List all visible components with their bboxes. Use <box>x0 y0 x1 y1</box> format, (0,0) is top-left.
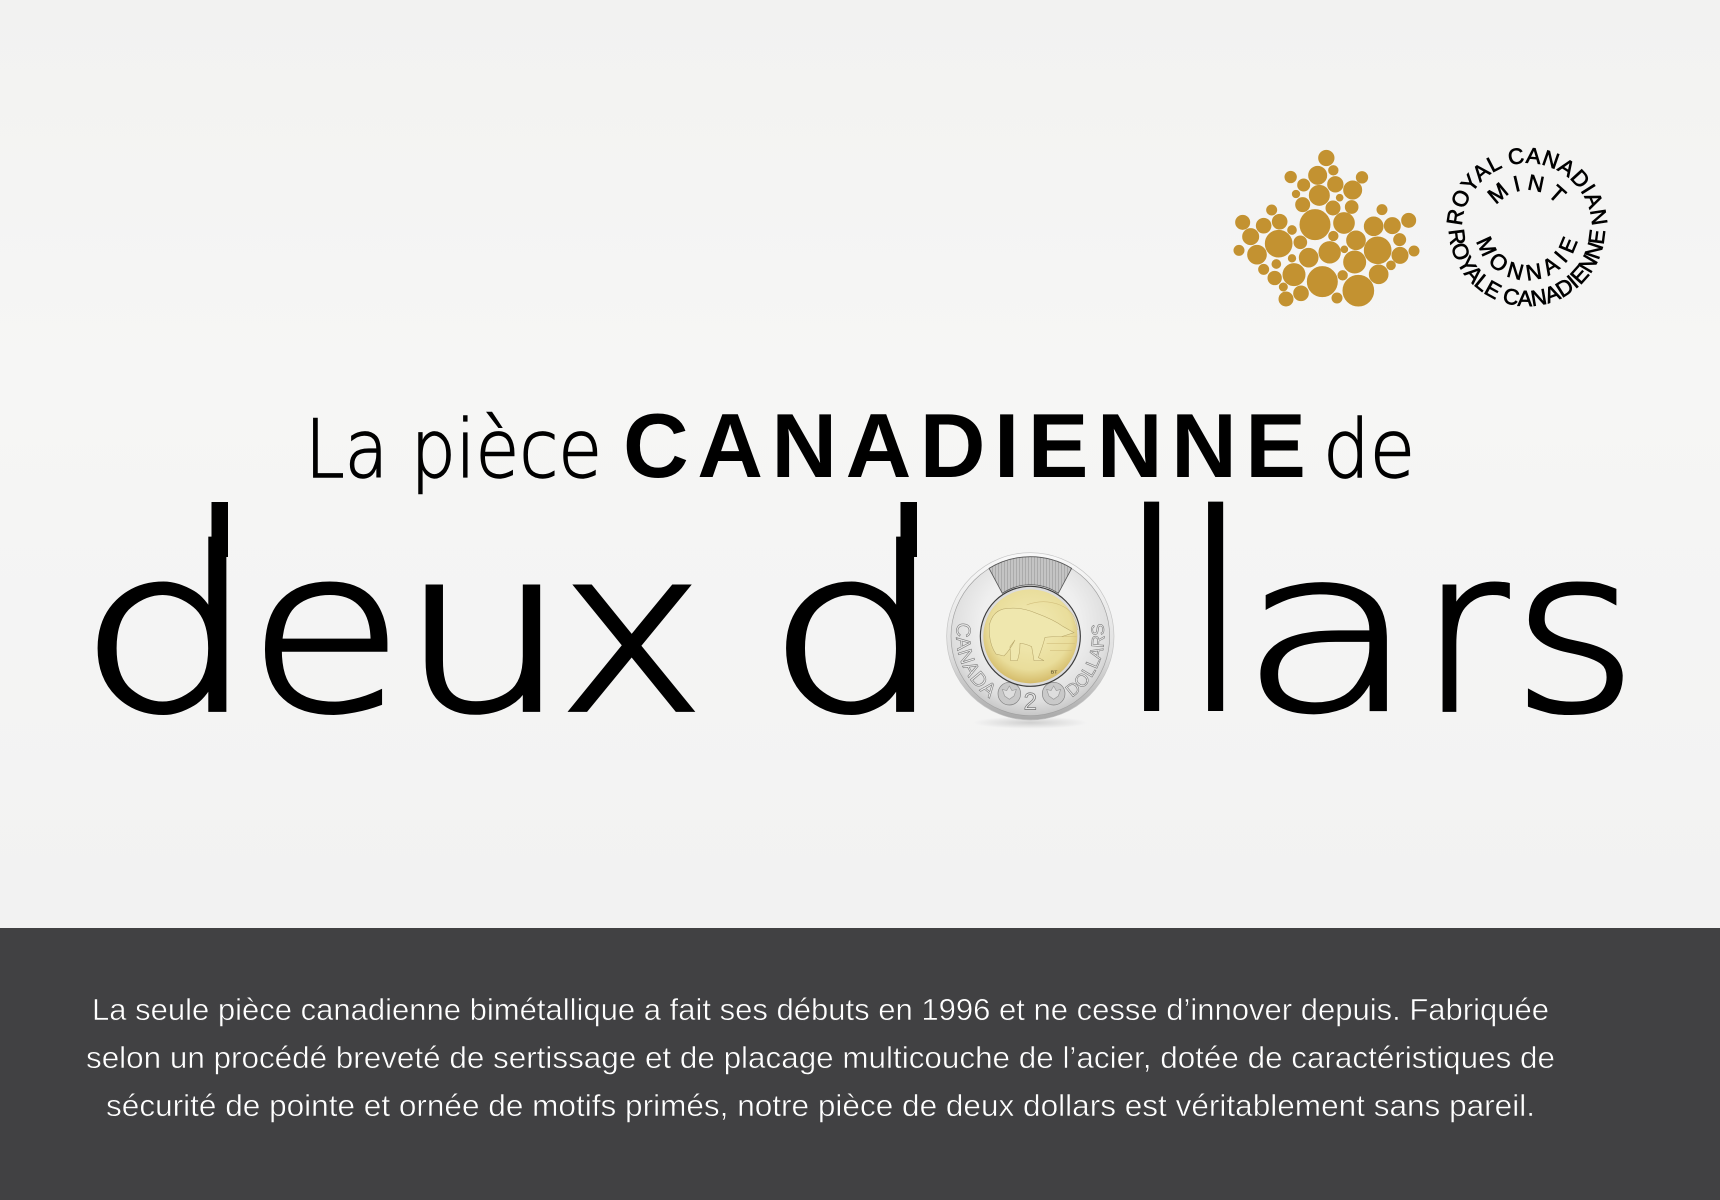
icon: maple leaf of gold dots <box>1234 150 1419 306</box>
logo wordmark: Royal Canadian Mint / Monnaie royale canadienne: MONNAIE <box>1476 236 1578 281</box>
ring legend <box>956 624 1105 699</box>
title: deux dollars: d <box>78 501 255 763</box>
logo wordmark: Royal Canadian Mint / Monnaie royale canadienne: ROYALE CANADIENNE <box>1448 230 1606 306</box>
title: deux dollars: l <box>1170 456 1263 776</box>
text: description: La seule pièce canadienne bimétallique a fait ses débuts en 1996 et ne cesse d’innover depuis. Fabriquée <box>92 993 1549 1027</box>
striped top panel <box>989 557 1072 593</box>
title: deux dollars: e <box>248 501 404 763</box>
logo wordmark: Royal Canadian Mint / Monnaie royale canadienne <box>1446 148 1608 306</box>
text: La pièce: La pièce <box>305 403 602 496</box>
text: description <box>86 993 1555 1123</box>
title: deux dollars: r <box>1420 501 1508 763</box>
logo wordmark: Royal Canadian Mint / Monnaie royale canadienne: ROYAL CANADIAN <box>1446 148 1608 225</box>
title: deux dollars: a <box>1238 501 1418 763</box>
title: deux dollars: d <box>767 502 943 763</box>
coin shadow <box>974 717 1087 729</box>
text: de: de <box>1323 403 1415 496</box>
title: deux dollars <box>78 456 1637 776</box>
text: CANADIENNE: CANADIENNE <box>623 396 1306 497</box>
title: deux dollars: s <box>1512 501 1637 763</box>
polar bear <box>989 608 1074 661</box>
text: description: selon un procédé breveté de sertissage et de placage multicouche de l’acier, dotée de caractéristiques de <box>86 1041 1555 1075</box>
text: description: sécurité de pointe et ornée de motifs primés, notre pièce de deux dollars est véritablement sans pareil. <box>106 1089 1535 1123</box>
silver ring <box>951 557 1110 716</box>
title: deux dollars: x <box>559 502 704 763</box>
ring legend: DOLLARS <box>1065 624 1105 698</box>
coin: two-dollar polar bear coin <box>946 552 1114 728</box>
title: deux dollars: l <box>1106 456 1199 776</box>
small maple discs <box>998 682 1065 705</box>
engraver mark: BT <box>1051 669 1057 675</box>
title line: La pièce CANADIENNE de <box>305 396 1415 497</box>
denomination: 2 <box>1024 688 1037 715</box>
ring legend: CANADA <box>956 624 994 699</box>
hill and water <box>1027 602 1077 651</box>
title: deux dollars: u <box>400 502 567 763</box>
gold core <box>980 586 1080 686</box>
background <box>0 0 1720 928</box>
coin rim <box>947 553 1114 720</box>
panel: description band <box>0 928 1720 1200</box>
logo wordmark: Royal Canadian Mint / Monnaie royale canadienne: MINT <box>1486 174 1568 204</box>
